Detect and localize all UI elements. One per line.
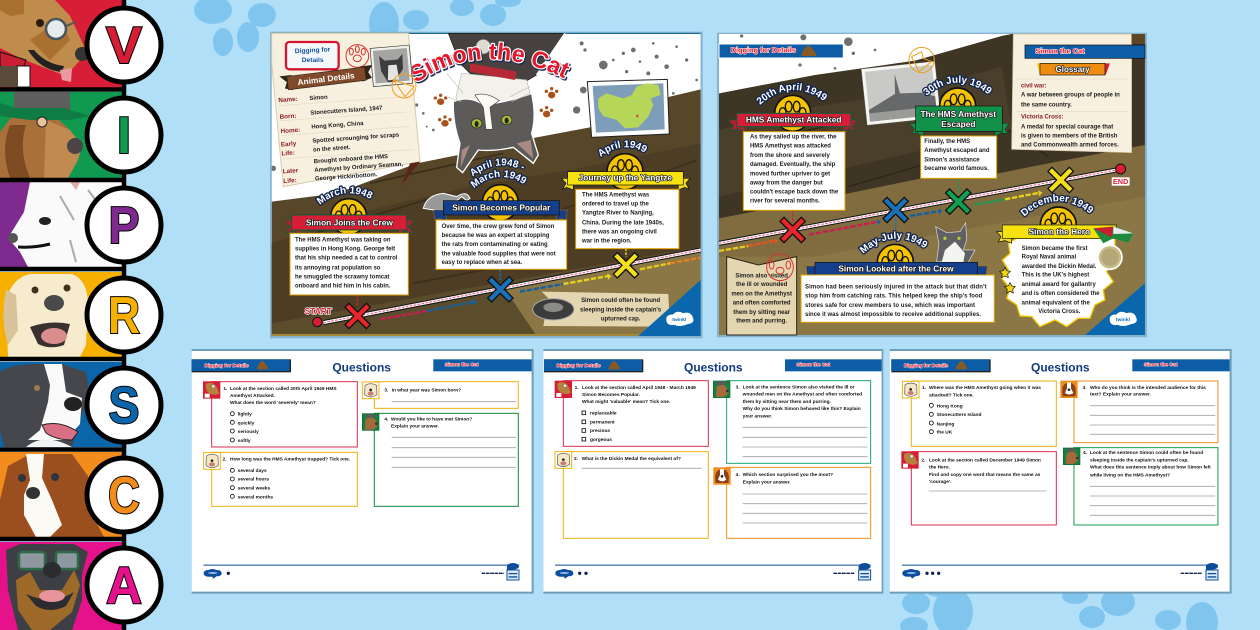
section: Simon Joins the Crew <box>283 185 414 296</box>
photo: ship <box>861 61 941 125</box>
panel: poster page 2 <box>717 32 1147 338</box>
question 2: several hours <box>238 477 269 483</box>
section: Simon the Hero: Royal Naval animal <box>1022 255 1077 261</box>
question 4: What does this sentence imply about how Simon felt <box>1090 465 1211 471</box>
VIPERS band: A <box>0 542 123 630</box>
panel: question sheet 3 <box>890 349 1232 594</box>
panel: glossary: A medal for special courage that <box>1021 125 1113 131</box>
heading: Questions: Questions <box>332 361 391 375</box>
callout: upturned cap: sleeping inside the captain's <box>580 307 662 313</box>
section: Simon Joins the Crew: supplies in Hong Kong. George felt <box>295 246 395 252</box>
callout: visited the ill <box>727 257 797 335</box>
question 3: In what year was Simon born? <box>392 388 461 394</box>
section: Simon Looked after the Crew: since it was almost impossible to receive additional supplies. <box>805 312 981 318</box>
question 4: Which section surprised you the most? <box>743 472 833 478</box>
stamp: red paw <box>767 254 793 281</box>
letter circle V <box>87 8 161 82</box>
footer <box>203 563 519 580</box>
question 3: 3. <box>736 385 740 391</box>
panel: question sheet 1 <box>192 349 534 594</box>
panel: glossary: Victoria Cross: <box>1021 115 1063 121</box>
question 1: attacked? Tick one. <box>929 393 974 399</box>
marker: red X <box>349 295 366 325</box>
section: HMS Amethyst Attacked: 20th April 1949 <box>755 82 828 106</box>
letter circle C: C <box>108 467 140 525</box>
section: Simon Joins the Crew: its annoying rat population so <box>295 265 381 271</box>
question 4 <box>1063 448 1218 525</box>
question 2: Find and copy one word that means the same as <box>929 472 1041 478</box>
end marker: END <box>1113 177 1128 186</box>
question 4: while living on the HMS Amethyst? <box>1089 472 1170 478</box>
animal details rows: Hong Kong, China <box>311 121 364 131</box>
stamp: orange paw <box>909 47 934 73</box>
callout: visited the ill: and often comforted <box>733 300 791 306</box>
animal details rows: Name: <box>278 96 298 104</box>
section: Simon Joins the Crew: he smuggled the scrawny tomcat <box>295 275 389 281</box>
heading bar: Simon the Cat <box>785 359 882 371</box>
question 1: replaceable <box>590 411 617 417</box>
panel: animal details <box>272 33 420 187</box>
section: Simon Joins the Crew: The HMS Amethyst was taking on <box>295 238 391 244</box>
panel: glossary: is given to members of the British <box>1021 133 1118 139</box>
marker: green X <box>950 178 967 210</box>
question 1: softly <box>238 438 251 444</box>
question 1: Hong Kong <box>937 403 963 409</box>
section: Simon the Hero: and is often considered the <box>1022 291 1100 297</box>
stars <box>1000 267 1015 293</box>
question 2: several months <box>238 494 273 500</box>
heading: digging for details <box>719 44 843 58</box>
question 1: precious <box>590 428 610 434</box>
animal details rows: on the street. <box>313 145 351 154</box>
question 1: lightly <box>238 411 252 417</box>
question 1: quickly <box>238 420 255 426</box>
question 2: 2. <box>223 457 227 463</box>
heading bar: digging for details: Digging for Details <box>557 363 601 369</box>
question 4: 4. <box>736 472 740 478</box>
dashed progress arrows <box>381 258 701 319</box>
animal details rows: Born: <box>279 113 297 121</box>
callout: upturned cap: Simon could often be found <box>581 298 661 304</box>
question 1: Stonecutters Island <box>937 412 982 418</box>
letter circle V: V <box>106 17 142 75</box>
section: Simon Looked after the Crew <box>800 222 995 323</box>
badge: digging for details: Digging for <box>295 46 331 55</box>
animal details rows: Amethyst by Ordinary Seaman, <box>314 162 404 174</box>
section: HMS Amethyst Attacked: moved further upriver to get <box>750 171 830 177</box>
illustration: rat <box>423 193 470 212</box>
question 1: What might 'valuable' mean? Tick one. <box>582 399 671 405</box>
question 1: 1. <box>922 385 927 391</box>
question 1: Amethyst Attacked. <box>230 393 276 399</box>
section: Simon Becomes Popular: Simon Becomes Popular <box>452 202 551 212</box>
letter circle P: P <box>108 197 140 255</box>
photo: Simon <box>370 45 413 87</box>
animal details rows: Stonecutters Island, 1947 <box>310 106 383 117</box>
animal details rows: Life: <box>283 177 297 185</box>
letter circle S: S <box>108 377 140 435</box>
heading bar: digging for details <box>544 359 643 372</box>
section: The HMS Amethyst Escaped: Amethyst escaped and <box>924 148 990 154</box>
section: The HMS Amethyst Escaped: The HMS Amethyst <box>921 109 996 119</box>
question 3: them by sitting near them and purring. <box>743 399 832 405</box>
letter circle I <box>87 98 161 172</box>
question 4: Would you like to have met Simon? <box>391 416 472 422</box>
section: Simon the Hero: animal equivalent of the <box>1022 300 1090 306</box>
callout: visited the ill: Simon also visited <box>735 273 788 279</box>
question 3: Why do you think Simon behaved like this? Explain <box>743 406 861 412</box>
letter circle C <box>87 458 161 532</box>
section: Simon the Hero: Simon became the first <box>1022 246 1087 252</box>
heading bar: Simon the Cat <box>433 359 532 371</box>
callout: visited the ill: them and purring. <box>736 319 787 325</box>
panel: poster page 1 <box>270 32 703 338</box>
animal details rows: Later <box>283 167 299 175</box>
stamp: orange paw <box>392 74 416 98</box>
section: Simon Joins the Crew: March 1948 <box>315 185 374 206</box>
section: Simon the Hero: Victoria Cross. <box>1038 309 1081 315</box>
question 1 <box>555 381 708 446</box>
badge: digging for details: Details <box>302 57 324 64</box>
section: HMS Amethyst Attacked: As they sailed up the river, the <box>750 135 837 141</box>
question 1: gorgeous <box>590 437 612 443</box>
question 4: sleeping inside the captain's upturned cap. <box>1090 457 1189 463</box>
question 3 <box>1061 381 1218 443</box>
question 3: text? Explain your answer. <box>1090 392 1152 398</box>
question 3: Who do you think is the intended audience for this <box>1090 385 1206 391</box>
section: Simon Becomes Popular: March 1949 <box>469 168 528 190</box>
letter circle P <box>87 188 161 262</box>
VIPERS band: V <box>0 0 123 88</box>
illustration: small cat <box>936 223 975 262</box>
animal details rows <box>278 88 415 185</box>
footer <box>555 563 871 580</box>
section: Simon Becomes Popular: Over time, the crew grew fond of Simon <box>442 224 555 230</box>
section: The HMS Amethyst Escaped: 30th July 1949 <box>922 74 993 96</box>
paw prints around cat <box>433 87 559 127</box>
section: Journey up the Yangtze: Yangtze River to Nanjing, <box>582 211 654 217</box>
section: HMS Amethyst Attacked: away from the danger but <box>750 180 823 186</box>
section: HMS Amethyst Attacked: from the shore and severely <box>750 153 830 159</box>
question 3: Look at the sentence Simon also visited the ill or <box>743 385 855 391</box>
panel: glossary: A war between groups of people in <box>1021 93 1120 99</box>
question 1: 1. <box>223 386 228 392</box>
question 3: 3. <box>1083 385 1087 391</box>
question 1 <box>203 382 357 447</box>
VIPERS band: S <box>0 362 123 447</box>
marker: yellow X <box>617 248 635 274</box>
section: Simon Becomes Popular: because he was an expert at stopping <box>442 233 550 239</box>
callout: visited the ill: the ill or wounded <box>736 282 788 288</box>
VIPERS band: P <box>0 182 123 267</box>
heading: animal details: Animal Details <box>297 70 355 87</box>
section: HMS Amethyst Attacked: couldn't escape back down the <box>750 189 839 195</box>
section: HMS Amethyst Attacked: HMS Amethyst was attacked <box>750 144 831 150</box>
animal details rows: Spotted scrounging for scraps <box>312 133 400 145</box>
heading: Simon the Cat: Simon the Cat <box>1035 47 1085 56</box>
section: The HMS Amethyst Escaped: became world famous. <box>924 166 989 172</box>
question 2: 2. <box>574 456 579 462</box>
question 3: your answer. <box>743 414 773 420</box>
question 2 <box>902 452 1056 525</box>
question 2: Look at the section called December 1949 Simon <box>929 458 1041 464</box>
illustration: Simon the cat <box>447 33 565 173</box>
section: Journey up the Yangtze: China. During the late 1940s, <box>582 220 664 226</box>
section: Simon Joins the Crew: onboard and hid him in his cabin. <box>295 283 391 289</box>
VIPERS band: I <box>0 92 123 178</box>
section: Simon Becomes Popular: the valuable food supplies that were not <box>442 251 556 257</box>
question 1: Look at the section called 20th April 1949 HMS <box>230 386 337 392</box>
marker: red X <box>784 210 801 239</box>
question 1: Where was the HMS Amethyst going when it was <box>929 385 1041 391</box>
heading: Questions: Questions <box>1031 361 1090 375</box>
question 1: What does the word 'severely' mean? <box>230 400 316 406</box>
heading bar: digging for details <box>891 359 991 372</box>
animal details rows: Brought onboard the HMS <box>314 154 388 165</box>
animal details rows: Home: <box>280 127 301 135</box>
section: Simon Joins the Crew: that his ship needed a cat to control <box>295 256 398 262</box>
question 4: Explain your answer. <box>391 423 440 429</box>
panel: glossary <box>1012 34 1145 153</box>
panel: glossary: civil war: <box>1021 83 1047 89</box>
section: Simon Becomes Popular: easy to replace when at sea. <box>442 260 522 266</box>
question 4 <box>362 413 518 506</box>
heading bar: Simon the Cat: Simon the Cat <box>1144 362 1178 368</box>
question 1: seriously <box>238 429 259 435</box>
section: HMS Amethyst Attacked <box>728 82 858 211</box>
letter circle R: R <box>108 287 140 345</box>
section: Journey up the Yangtze: ordered to travel up the <box>582 202 649 208</box>
letter circle R <box>87 278 161 352</box>
heading bar: Simon the Cat: Simon the Cat <box>445 362 479 368</box>
question 1: permanent <box>590 419 615 425</box>
question 4: 4. <box>384 416 389 422</box>
question 1: Nanjing <box>937 421 954 427</box>
letter circle A: A <box>106 557 142 615</box>
section: Journey up the Yangtze: April 1949 <box>598 139 648 158</box>
question 1: the UK <box>937 430 953 436</box>
question 2: How long was the HMS Amethyst trapped? Tick one. <box>230 457 351 463</box>
question 2 <box>204 452 357 506</box>
callout: visited the ill: them by sitting near <box>733 310 791 316</box>
twinkl corner: twinkl <box>672 317 687 323</box>
question 2: 'courage'. <box>929 479 952 485</box>
question 3 <box>362 382 518 408</box>
section: Simon Becomes Popular <box>433 157 568 270</box>
heading: glossary: Glossary <box>1056 65 1090 74</box>
section: The HMS Amethyst Escaped <box>910 74 1009 179</box>
stamp: red paw <box>346 45 369 67</box>
section: Simon Becomes Popular: April 1948 - <box>470 157 526 178</box>
question 2: the Hero. <box>929 465 951 471</box>
section: Simon the Hero: animal award for gallantry <box>1022 282 1096 288</box>
question 3: wounded men on the Amethyst and often comforted <box>742 392 862 398</box>
animal details rows: Life: <box>281 150 295 157</box>
panel: glossary: and Commonwealth armed forces. <box>1021 143 1119 149</box>
letter circle A <box>87 548 161 622</box>
timeline rope <box>323 250 701 323</box>
start marker <box>305 306 332 327</box>
section: Simon Looked after the Crew: Simon had been seriously injured in the attack but that didn't <box>805 284 987 290</box>
section: HMS Amethyst Attacked: river for several months. <box>750 199 820 205</box>
question 4: Look at the sentence Simon could often be found <box>1090 450 1203 456</box>
footer <box>902 563 1218 580</box>
timeline rope <box>719 169 1120 243</box>
section: Simon Becomes Popular: the rats from contaminating or eating <box>442 242 548 248</box>
question 1: 1. <box>575 385 579 391</box>
panel: question sheet 2 <box>543 349 883 594</box>
letter circle I: I <box>117 107 131 165</box>
section: Journey up the Yangtze: The HMS Amethyst was <box>582 192 650 198</box>
heading: Questions: Questions <box>684 361 743 375</box>
question 2: 2. <box>921 458 926 464</box>
end marker <box>1112 164 1130 186</box>
heading: animal details <box>279 65 374 92</box>
animal details rows: Early <box>281 140 297 149</box>
question 1: Simon Becomes Popular. <box>582 392 641 398</box>
twinkl corner <box>638 280 701 336</box>
icon: Dickin medal <box>1093 227 1133 269</box>
heading bar: Simon the Cat: Simon the Cat <box>797 362 830 368</box>
section: Journey up the Yangtze: there was an ongoing civil <box>582 230 657 236</box>
section: Simon the Hero: This is the UK's highest <box>1022 273 1089 279</box>
callout: upturned cap <box>533 292 670 327</box>
section: HMS Amethyst Attacked: HMS Amethyst Attacked <box>746 115 841 125</box>
badge: digging for details <box>286 42 339 69</box>
marker: blue X <box>887 201 904 233</box>
question 1 <box>902 381 1056 446</box>
panel: glossary: the same country. <box>1021 102 1072 108</box>
callout: visited the ill: men on the Amethyst <box>731 292 792 298</box>
marker: blue X <box>492 270 509 298</box>
question 2: several weeks <box>238 486 270 492</box>
start marker: START <box>305 306 332 316</box>
section: The HMS Amethyst Escaped: Simon's assistance <box>924 157 980 163</box>
marker: yellow X <box>1052 171 1069 189</box>
animal details rows: George Hickinbottom. <box>315 172 378 183</box>
animal details rows: Simon <box>309 95 328 102</box>
heading bar: digging for details: Digging for Details <box>904 363 948 369</box>
title: Simon the Cat <box>412 41 572 84</box>
section: Simon Looked after the Crew: May-July 1949 <box>858 230 929 255</box>
section: HMS Amethyst Attacked: damaged. Eventually, the ship <box>750 162 836 168</box>
section: Journey up the Yangtze: war in the region. <box>581 238 632 244</box>
callout: upturned cap: upturned cap. <box>601 317 641 323</box>
heading: digging for details: Digging for Details <box>731 45 796 54</box>
question 3: 3. <box>384 388 389 394</box>
map of China <box>587 79 669 137</box>
VIPERS band: R <box>0 272 123 357</box>
question 4: 4. <box>1083 450 1088 456</box>
heading bar: digging for details: Digging for Details <box>205 363 249 369</box>
twinkl corner <box>1085 283 1145 335</box>
question 3 <box>713 381 871 463</box>
section: Simon the Hero: awarded the Dickin Medal. <box>1022 264 1097 270</box>
section: Simon the Hero <box>996 192 1144 328</box>
band dividers <box>0 0 124 630</box>
heading bar: Simon the Cat <box>1132 359 1230 371</box>
section: Journey up the Yangtze <box>561 139 730 250</box>
section: Simon the Hero: Simon the Hero <box>1029 226 1090 236</box>
section: The HMS Amethyst Escaped: Escaped <box>941 119 975 129</box>
question 1: Look at the section called April 1948 - March 1949 <box>582 385 696 391</box>
question 2: What is the Dickin Medal the equivalent of? <box>582 456 681 462</box>
section: The HMS Amethyst Escaped: Finally, the HMS <box>924 139 970 145</box>
twinkl corner: twinkl <box>1116 317 1131 323</box>
section: Simon the Hero: December 1949 <box>1018 192 1094 218</box>
VIPERS band: C <box>0 452 123 537</box>
letter circle S <box>87 368 161 442</box>
section: Simon Looked after the Crew: stores safe for crew members to use, which was important <box>805 303 975 309</box>
section: Journey up the Yangtze: Journey up the Yangtze <box>579 173 672 183</box>
question 2: several days <box>238 468 267 474</box>
question 4: Explain your answer. <box>743 480 791 486</box>
heading bar: digging for details <box>192 359 291 372</box>
section: Simon Joins the Crew: Simon Joins the Crew <box>306 218 393 228</box>
dashed progress arrows <box>719 190 1042 251</box>
section: Simon Looked after the Crew: stop him from catching rats. This helped keep the ship's food <box>805 294 983 300</box>
section: Simon Looked after the Crew: Simon Looked after the Crew <box>838 264 954 274</box>
question 4 <box>714 467 871 538</box>
question 2 <box>555 452 708 538</box>
